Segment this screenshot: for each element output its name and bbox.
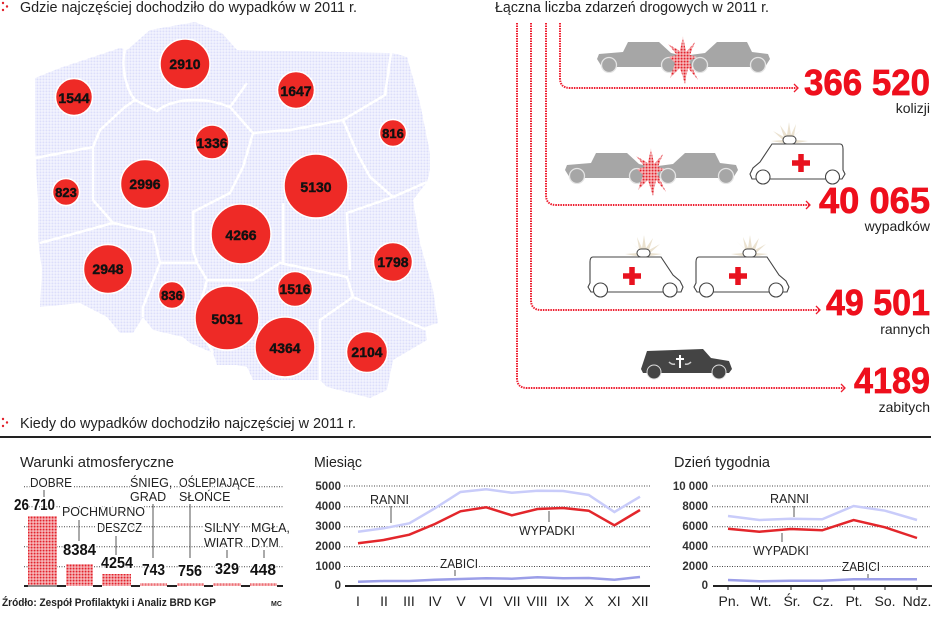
line: killed by month: [358, 577, 640, 582]
bar values: 4254: [101, 555, 133, 572]
y axis labels: 2000: [682, 561, 708, 573]
x axis labels: VI: [479, 593, 493, 609]
series labels: WYPADKI: [753, 544, 809, 558]
statistic: accidents: wypadków: [864, 218, 931, 234]
y axis labels: 5000: [315, 481, 341, 493]
bar values: 448: [250, 562, 276, 579]
heading: weather: Warunki atmosferyczne: [20, 454, 174, 471]
x axis labels: Śr.: [783, 592, 801, 609]
icon: two colliding cars: [597, 36, 770, 84]
statistic: injured: 49 501: [826, 282, 930, 323]
y axis labels: 1000: [315, 561, 341, 573]
category labels: POCHMURNO: [62, 505, 145, 519]
bubbles with accident counts: 1336: [196, 135, 228, 151]
bar values: 8384: [63, 542, 96, 559]
bubbles with accident counts: 1647: [280, 83, 312, 99]
x axis labels: So.: [874, 593, 896, 609]
x axis labels: V: [456, 593, 466, 609]
series labels: WYPADKI: [519, 524, 575, 538]
category labels: OŚLEPIAJĄCE: [179, 475, 255, 490]
icon: two ambulances: [588, 235, 789, 297]
x axis labels: X: [584, 593, 594, 609]
y axis labels: 0: [702, 580, 708, 592]
series labels: RANNI: [370, 493, 409, 507]
x axis labels: Wt.: [750, 593, 772, 609]
category labels: WIATR: [204, 536, 243, 550]
panel: total road events: [517, 23, 931, 415]
y axis labels: 0: [335, 580, 341, 592]
source note: MC: [271, 601, 282, 608]
bubbles with accident counts: 1798: [377, 254, 409, 270]
panel: weather conditions: [14, 454, 290, 586]
line: injured by month: [358, 489, 640, 532]
x axis labels: Ndz.: [903, 593, 931, 609]
category labels: [30, 475, 290, 550]
x axis labels: III: [403, 593, 415, 609]
line: accidents by month: [358, 507, 640, 543]
bubbles with accident counts: 1544: [58, 90, 90, 106]
bubbles with accident counts: 5031: [211, 311, 243, 327]
icon: hearse: [641, 349, 732, 379]
x axis labels: XII: [631, 593, 649, 609]
bar chart: weather: [24, 516, 283, 586]
bubbles with accident counts: 1516: [279, 281, 311, 297]
bar values: [14, 497, 276, 580]
bubbles with accident counts: 4266: [225, 227, 257, 243]
line: injured by weekday: [728, 506, 917, 520]
panel: month chart: [314, 454, 650, 609]
panel: map of Poland: [35, 22, 438, 398]
statistic: injured: rannych: [880, 321, 930, 337]
category labels: DOBRE: [30, 476, 72, 490]
bar values: 26 710: [14, 497, 55, 514]
x axis labels: I: [356, 593, 360, 609]
line: accidents by weekday: [728, 520, 917, 538]
y axis labels: 8000: [682, 501, 708, 513]
y axis labels: 3000: [315, 521, 341, 533]
heading: month: Miesiąc: [314, 454, 362, 471]
statistic: accidents: 40 065: [819, 180, 930, 221]
y axis labels: 4000: [315, 501, 341, 513]
x axis labels: XI: [607, 593, 621, 609]
x axis labels: IX: [556, 593, 570, 609]
statistic: collisions: 366 520: [804, 62, 930, 103]
statistic: collisions: kolizji: [896, 100, 930, 116]
x axis labels: VII: [503, 593, 521, 609]
x axis labels: [356, 593, 649, 609]
x axis labels: II: [380, 593, 388, 609]
source note: Źródło: Zespół Profilaktyki i Analiz BRD KGP: [2, 596, 216, 609]
bar values: 329: [215, 561, 239, 578]
y axis labels: 4000: [682, 541, 708, 553]
y axis labels: 2000: [315, 541, 341, 553]
y axis labels: [673, 481, 708, 592]
icon: colliding cars and ambulance: [565, 122, 845, 196]
x axis labels: IV: [428, 593, 442, 609]
series labels: [370, 493, 575, 576]
bubbles with accident counts: 2104: [351, 344, 383, 360]
statistic: killed: zabitych: [879, 399, 930, 415]
connector arrow: injured: [531, 23, 820, 314]
bar values: 756: [178, 563, 202, 580]
x axis labels: Pn.: [718, 593, 740, 609]
bubbles with accident counts: 823: [55, 185, 77, 200]
x axis labels: VIII: [526, 593, 548, 609]
series labels: [753, 492, 880, 578]
category labels: SILNY: [204, 521, 241, 535]
line: killed by weekday: [728, 579, 917, 581]
heading: weekday: Dzień tygodnia: [674, 454, 771, 471]
bubbles with accident counts: [52, 39, 412, 377]
panel: weekday chart: [673, 454, 932, 609]
x axis labels: Pt.: [845, 593, 863, 609]
leader lines: [44, 490, 264, 558]
category labels: MGŁA,: [251, 521, 290, 535]
bar values: 743: [142, 562, 165, 579]
category labels: GRAD: [130, 490, 166, 504]
connector arrow: accidents: [546, 23, 810, 209]
bubbles with accident counts: 5130: [300, 179, 332, 195]
connector arrow: killed: [517, 23, 845, 392]
category labels: DYM: [251, 536, 279, 550]
map shape with voivodeship borders: [35, 22, 438, 398]
y axis labels: 10 000: [673, 481, 708, 493]
y axis labels: 6000: [682, 521, 708, 533]
x axis labels: [718, 592, 931, 609]
category labels: DESZCZ: [97, 521, 142, 535]
x axis labels: Cz.: [812, 593, 834, 609]
category labels: ŚNIEG,: [130, 475, 172, 490]
series labels: ZABICI: [842, 560, 880, 574]
category labels: SŁOŃCE: [179, 489, 230, 504]
bubbles with accident counts: 2948: [92, 261, 124, 277]
bubbles with accident counts: 816: [382, 126, 404, 141]
connector arrow: collisions: [560, 23, 798, 92]
y axis labels: [315, 481, 341, 592]
bubbles with accident counts: 2910: [169, 56, 201, 72]
bubbles with accident counts: 4364: [269, 340, 301, 356]
series labels: ZABICI: [440, 557, 478, 571]
bubbles with accident counts: 836: [161, 288, 183, 303]
series labels: RANNI: [770, 492, 809, 506]
bubbles with accident counts: 2996: [129, 176, 161, 192]
title: when accidents happened: Kiedy do wypadków dochodziło najczęściej w 2011 r.: [20, 415, 356, 432]
statistic: killed: 4189: [854, 360, 930, 401]
